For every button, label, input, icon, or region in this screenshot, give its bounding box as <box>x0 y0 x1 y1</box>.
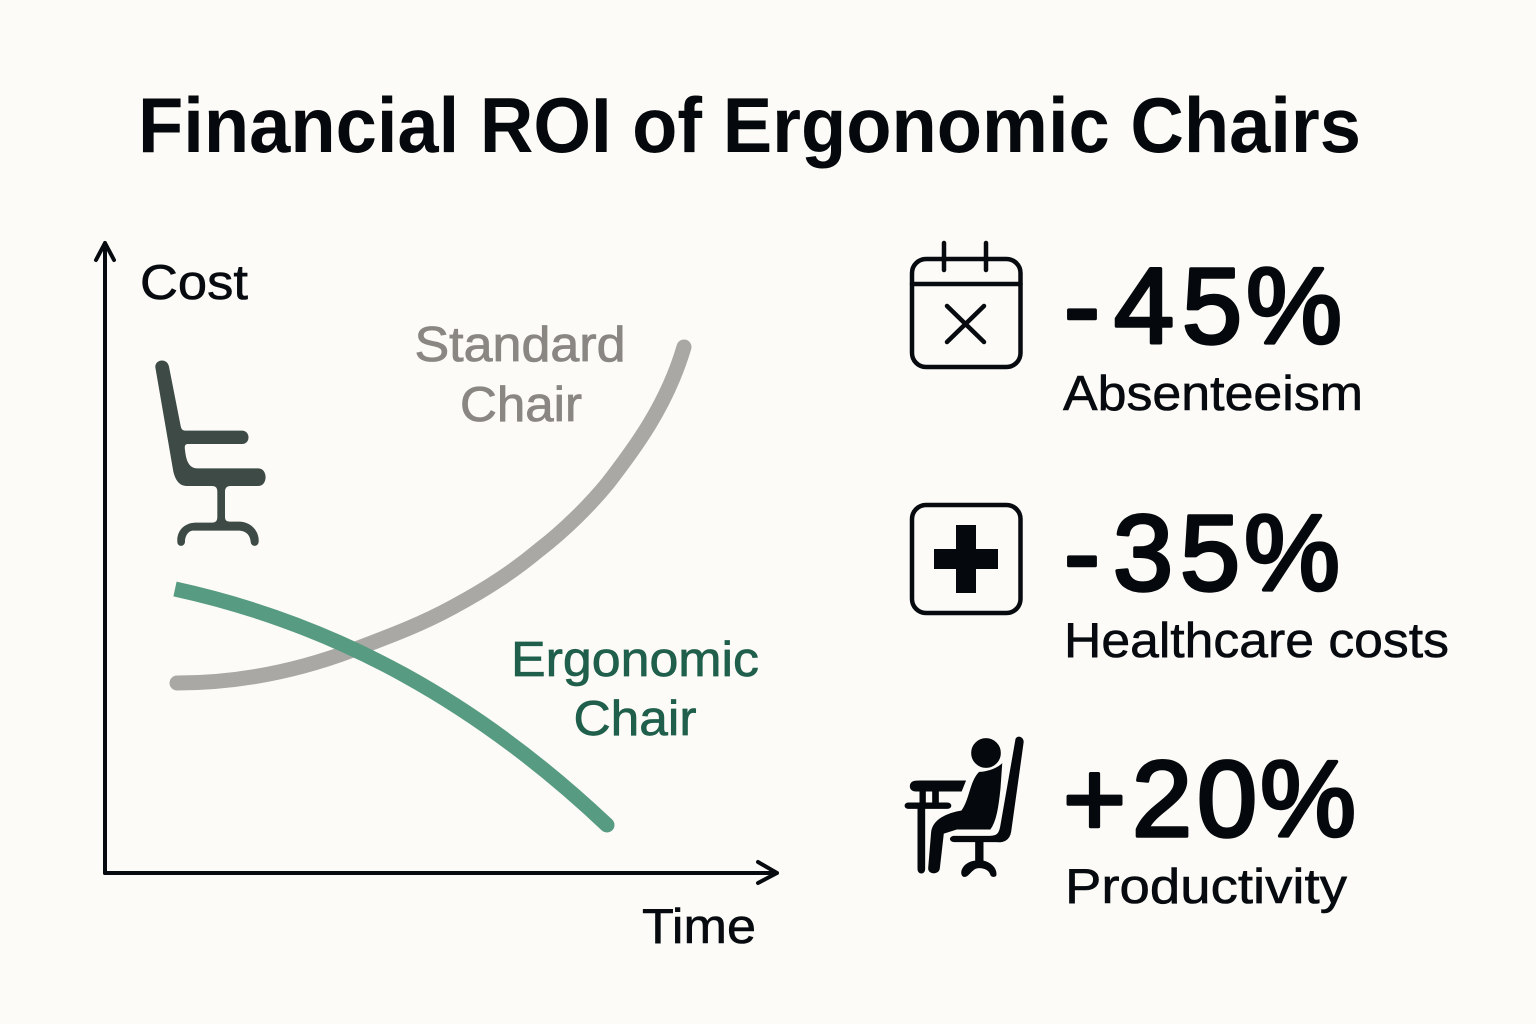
ergonomic chair label: Chair <box>574 692 696 746</box>
ergonomic chair curve <box>175 589 614 832</box>
title: Financial ROI of Ergonomic Chairs <box>138 81 1361 169</box>
panel: cost over time chart <box>96 243 777 954</box>
icon: seated person at desk <box>905 737 1023 876</box>
panel: absenteeism stat <box>912 243 1363 421</box>
stat value: -45% <box>1064 245 1342 366</box>
y axis label: Cost <box>140 256 248 310</box>
ergonomic chair label: Ergonomic <box>511 633 759 687</box>
standard chair label <box>414 318 626 432</box>
ergonomic chair label <box>511 633 759 746</box>
standard chair label: Standard <box>414 318 626 372</box>
stat value: +20% <box>1063 738 1356 859</box>
stat label: Productivity <box>1065 860 1348 914</box>
stat label: Healthcare costs <box>1064 614 1449 668</box>
x axis label: Time <box>642 900 756 954</box>
standard chair label: Chair <box>460 378 582 432</box>
icon: office chair <box>155 360 266 546</box>
stat label: Absenteeism <box>1063 367 1363 421</box>
standard chair curve <box>177 347 684 683</box>
panel: productivity stat <box>905 737 1356 914</box>
icon: calendar with x <box>912 243 1020 367</box>
stat value: -35% <box>1064 492 1340 613</box>
panel: healthcare stat <box>912 492 1449 668</box>
chart axes <box>96 243 777 883</box>
icon: medical cross <box>912 505 1020 613</box>
